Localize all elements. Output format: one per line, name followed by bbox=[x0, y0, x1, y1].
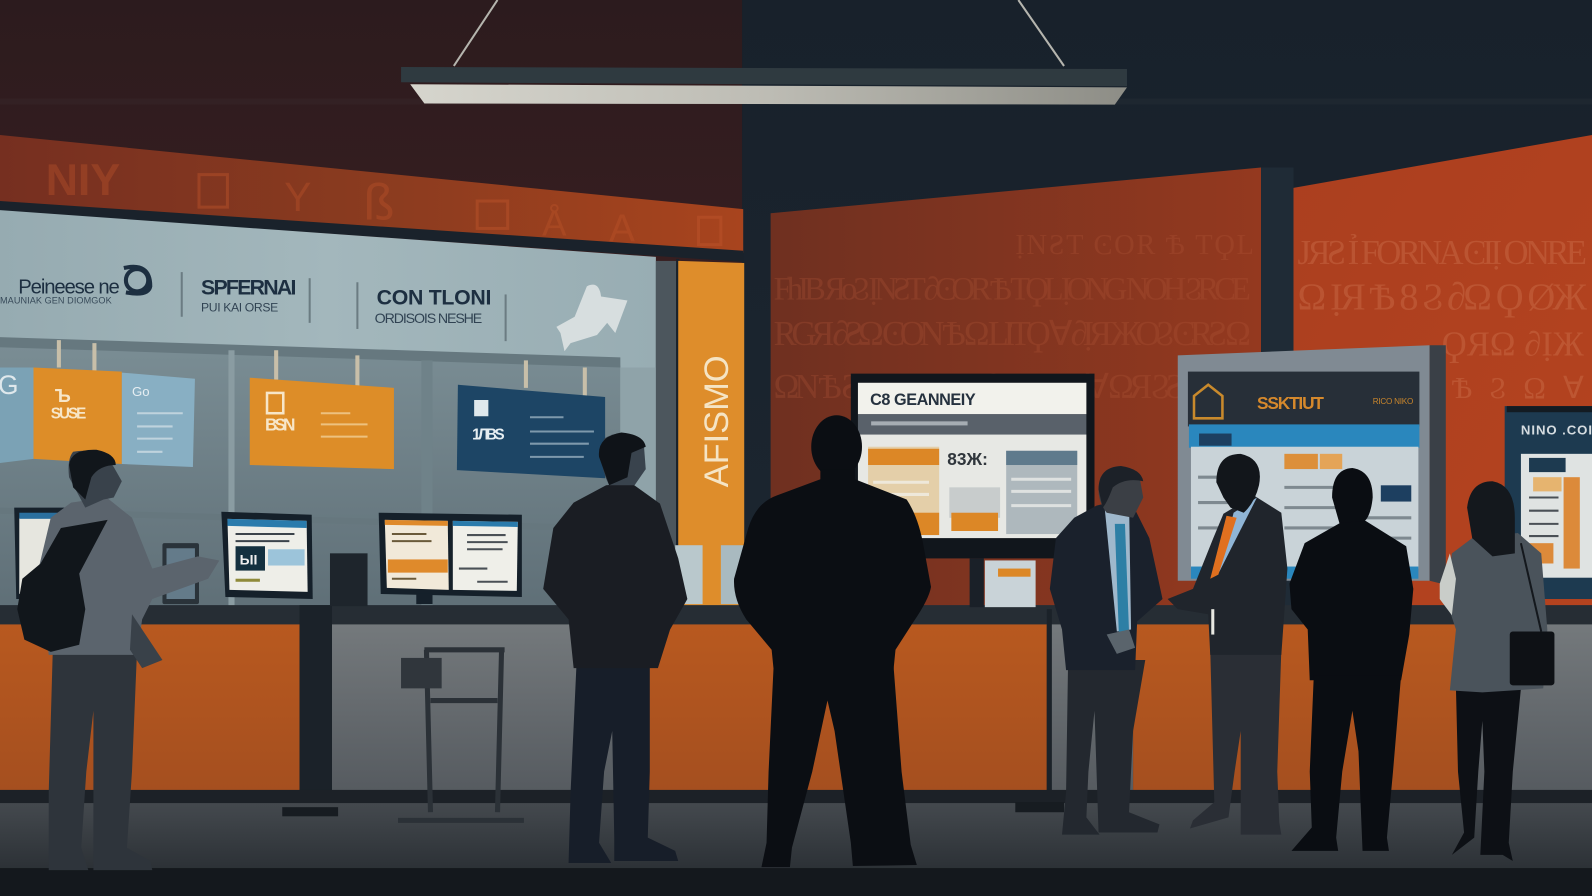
red patterned wall right: Ѣ Ϩ Ω Ɐ bbox=[1452, 371, 1584, 405]
person: man with glasses and blue tie bbox=[1050, 466, 1163, 835]
hanging panels: Ъ bbox=[55, 385, 71, 406]
hanging panels: SUSE bbox=[51, 405, 86, 422]
left frieze band with icons: A bbox=[609, 208, 635, 251]
left monitors bbox=[14, 508, 522, 606]
wall signage: MAUNIAK GEN DIOMGOK bbox=[0, 296, 112, 306]
red patterned wall centre: ΩN Ѣ ƧR Ω ЯOϨ ỊL ∂TЖ ϾG Ɐ ΩЯ ϨƧ Ѣ ON bbox=[774, 368, 1251, 406]
red patterned wall right bbox=[1261, 135, 1592, 619]
left frieze band with icons: Å bbox=[542, 203, 567, 244]
ceiling lamp bbox=[401, 0, 1127, 105]
person: silhouette man from behind bbox=[1289, 468, 1413, 851]
hanging panels: Go bbox=[132, 384, 150, 399]
far right screen bbox=[1505, 406, 1592, 599]
person: woman with shoulder bag bbox=[1440, 481, 1554, 861]
red patterned wall centre: RGЯ ∂ƧΩ ϾON Ѣ Ω LITϘ Ɐ ∂ỊЯ ЖOϨ ϾRƧ Ω bbox=[774, 315, 1251, 353]
red patterned wall right: JЯƧ Ỉ FORNA ϾIỊ ONRE bbox=[1298, 234, 1587, 272]
counter bbox=[0, 605, 1592, 808]
hanging panels bbox=[0, 340, 605, 478]
red patterned wall centre: ỊNƧT ϾOR Ѣ TϘL bbox=[1015, 230, 1254, 261]
red patterned wall centre bbox=[771, 168, 1261, 619]
right kiosk display bbox=[1178, 345, 1446, 585]
left monitors: ЫI bbox=[240, 553, 257, 569]
wall signage bbox=[0, 267, 627, 351]
icon: shoulder bag bbox=[1510, 543, 1554, 685]
wall signage: CON TLONI bbox=[377, 286, 491, 310]
wall signage: ORDISOIS NESHE bbox=[375, 311, 482, 327]
left frieze band with icons: Y bbox=[284, 174, 311, 220]
person: man in profile with orange tie bbox=[1168, 454, 1287, 835]
red patterned wall right: Ω ỊЯ Ѣ 8 Ϩ ∂Ω Ϙ ØЖ bbox=[1298, 277, 1587, 319]
red patterned wall right: ϘЯΩ ∂ỊЖ bbox=[1442, 325, 1584, 363]
left frieze band with icons: ß bbox=[363, 173, 394, 230]
orange vertical banner bbox=[656, 259, 744, 611]
person: man in long dark coat bbox=[543, 433, 687, 863]
wall signage: Peineese ne bbox=[18, 276, 120, 298]
icon: white bird emblem bbox=[556, 285, 627, 351]
orange vertical banner: AFISMO bbox=[698, 355, 736, 487]
centre display screen bbox=[851, 374, 1094, 607]
icon: backpack bbox=[17, 520, 108, 652]
hanging panels: BSN bbox=[265, 414, 295, 434]
right kiosk display: SSKTIUT bbox=[1257, 393, 1324, 413]
centre display screen: C8 GEANNEIY bbox=[870, 391, 976, 409]
hanging panels: 1ЛBS bbox=[472, 427, 505, 444]
wall signage: PUI KAI ORSE bbox=[201, 301, 278, 315]
left frieze band with icons bbox=[0, 135, 743, 262]
icon: spiral logo bbox=[124, 267, 150, 294]
wall signage: SPFERNAI bbox=[201, 275, 296, 299]
right kiosk display: RICO NIKO bbox=[1373, 397, 1413, 406]
red patterned wall centre: FhIB ЯoϨ ỊNƧT ∂ϾOR Ѣ TϘL ỊONG NOH ϨRCE bbox=[774, 272, 1251, 308]
far right screen: NINO .COI bbox=[1521, 423, 1592, 438]
floor bbox=[0, 802, 1592, 896]
left glass wall bbox=[0, 210, 656, 621]
person: man with backpack bbox=[17, 450, 219, 870]
centre display screen: 83Ж: bbox=[947, 449, 988, 469]
left frieze band with icons: NIY bbox=[46, 156, 120, 205]
cart bbox=[398, 650, 524, 820]
back wall and ceiling bbox=[0, 0, 1592, 629]
person: central man seen from behind, hands on hips bbox=[734, 415, 931, 867]
